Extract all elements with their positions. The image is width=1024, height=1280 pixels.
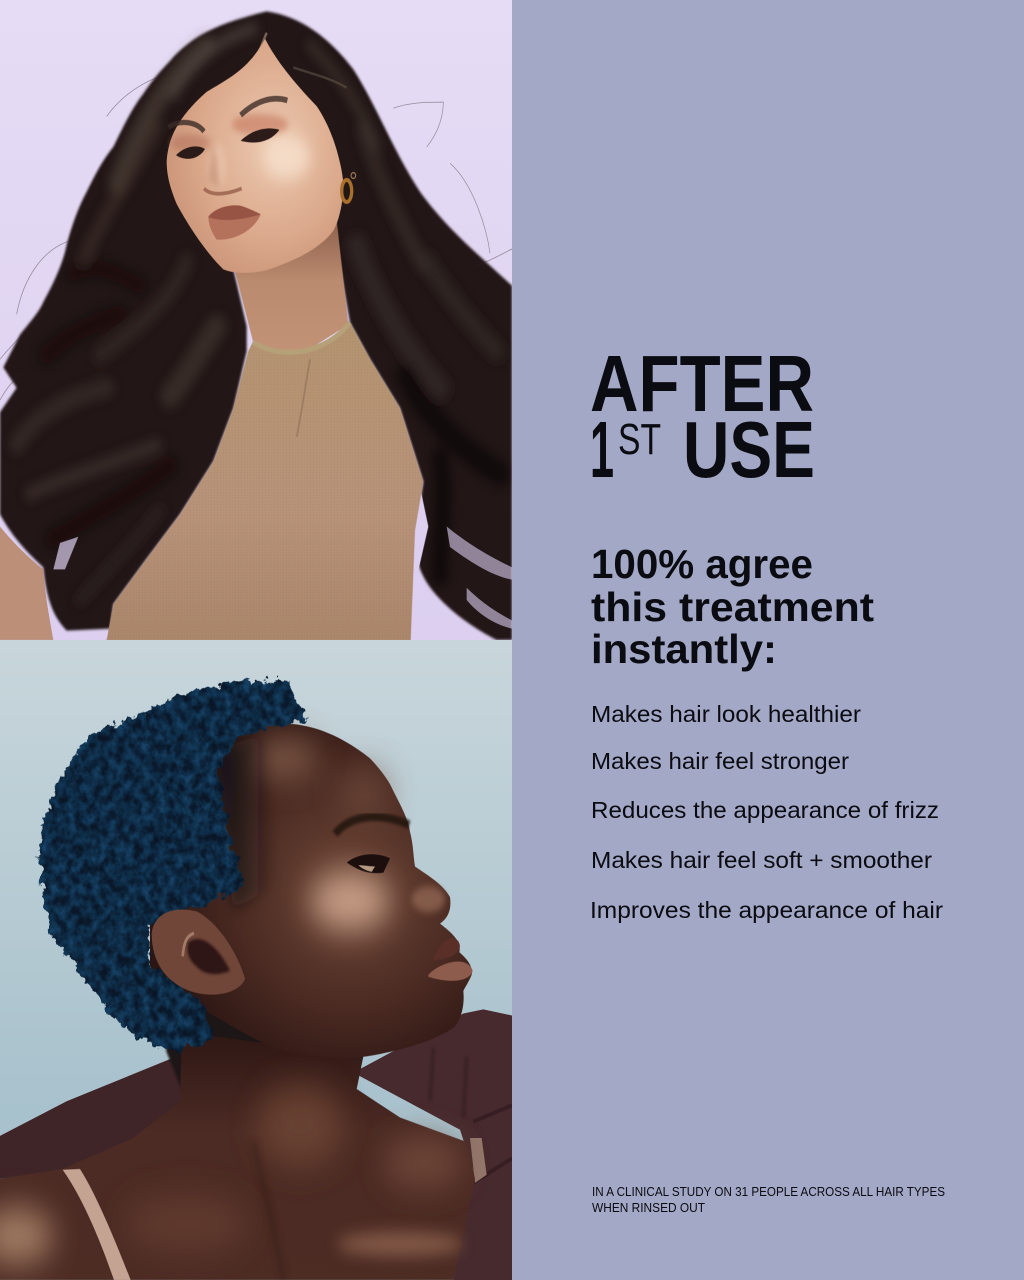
- lips: [208, 205, 261, 240]
- ear: [152, 909, 245, 995]
- subheading: this treatment: [591, 584, 874, 630]
- benefits list: Improves the appearance of hair: [590, 897, 943, 923]
- benefits list: [590, 701, 943, 923]
- benefits list: Makes hair look healthier: [591, 701, 861, 727]
- neck and shoulders: [0, 1032, 475, 1280]
- footnote: [592, 1185, 945, 1215]
- long dark hair: [0, 11, 512, 640]
- eye: [347, 854, 390, 873]
- gold hoop earring: [342, 173, 356, 202]
- face: [167, 39, 343, 273]
- short blue afro hair: [38, 681, 310, 1052]
- photo: woman with long dark hair on lilac background: [0, 0, 512, 1280]
- head and face in profile: [150, 724, 473, 1058]
- temple shadow: [213, 734, 277, 909]
- right text panel background: [512, 0, 1024, 1280]
- lilac gaps between lower hair strands: [53, 490, 512, 629]
- flyaway hair strands: [0, 78, 512, 400]
- main heading: 1: [590, 405, 614, 494]
- bra strap: [63, 1169, 131, 1280]
- benefits list: Reduces the appearance of frizz: [591, 797, 939, 823]
- neck: [233, 220, 348, 355]
- main heading: USE: [683, 405, 815, 494]
- main heading: [590, 339, 815, 494]
- knit mesh top: [107, 322, 423, 640]
- subheading: [591, 541, 874, 672]
- subheading: instantly:: [591, 626, 777, 672]
- arm: [0, 527, 53, 640]
- main heading: AFTER: [590, 339, 814, 428]
- eyebrow: [335, 817, 409, 834]
- nose: [204, 189, 242, 194]
- main heading: ST: [618, 415, 661, 464]
- photo: profile of woman with short blue hair: [0, 526, 512, 1280]
- subheading: 100% agree: [591, 541, 813, 587]
- footnote: IN A CLINICAL STUDY ON 31 PEOPLE ACROSS ALL HAIR TYPES: [592, 1185, 945, 1199]
- brown puffer jacket: [0, 1009, 512, 1280]
- benefits list: Makes hair feel stronger: [591, 748, 849, 774]
- shadow behind ear and nape: [150, 967, 267, 1089]
- footnote: WHEN RINSED OUT: [592, 1201, 705, 1215]
- eyes: [176, 146, 205, 159]
- eyebrows: [168, 122, 204, 131]
- benefits list: Makes hair feel soft + smoother: [591, 847, 932, 873]
- lips: [433, 938, 460, 960]
